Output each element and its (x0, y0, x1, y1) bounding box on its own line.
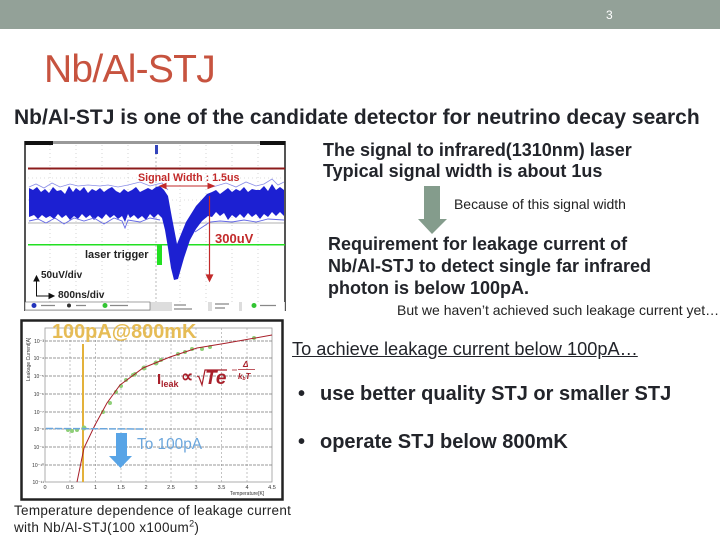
chart: leakage current vs temperature (20, 319, 284, 501)
arrow: to 100pA (109, 433, 132, 468)
x axis labels: 0 (43, 485, 47, 491)
fit curve (77, 335, 272, 482)
formula: Te (205, 368, 227, 389)
bullet: better quality: use better quality STJ or smaller STJ (320, 383, 671, 405)
label: 100pA at 800mK: 100pA@800mK (52, 321, 197, 343)
formula (157, 360, 255, 389)
subtitle: Nb/Al-STJ is one of the candidate detector for neutrino decay search (14, 106, 700, 129)
axis arrows (34, 276, 54, 298)
title: Nb/Al-STJ (44, 48, 215, 91)
header bar (0, 0, 720, 29)
red threshold line (28, 168, 285, 170)
text block: requirement: photon is below 100pA. (328, 278, 529, 298)
bullet: lower temperature: • (298, 431, 305, 453)
label: 300uV: 300uV (215, 231, 254, 246)
orange 800 mK line (82, 344, 84, 482)
y axis labels: 10⁻⁶ (34, 392, 44, 398)
x axis labels: 1 (94, 485, 97, 491)
x axis title: Temperature[K] (230, 491, 265, 497)
chart: oscilloscope signal (24, 141, 286, 311)
status strip (25, 302, 285, 311)
x axis labels: 4.5 (268, 485, 276, 491)
text block: signal description (323, 140, 632, 181)
y axis title: Leakage Current[A] (26, 337, 32, 381)
measured data points (66, 336, 256, 433)
formula: ∝ (181, 367, 193, 386)
y axis labels: 10⁻⁸ (34, 427, 44, 433)
text block: signal description: The signal to infrared(1310nm) laser (323, 140, 632, 160)
y axis labels: 10⁻⁷ (34, 410, 44, 416)
text block: requirement (328, 234, 651, 298)
caption: Temperature dependence of leakage current (14, 503, 291, 518)
formula: T (246, 372, 252, 381)
noise band and pulse (29, 179, 284, 280)
x axis labels: 2 (144, 485, 148, 491)
x axis labels (43, 485, 276, 491)
y axis labels (32, 339, 44, 486)
x axis labels: 2.5 (167, 485, 175, 491)
heading: how to achieve: To achieve leakage current below 100pA… (292, 339, 638, 359)
y axis labels: 10⁻⁴ (34, 356, 44, 362)
y axis labels: 10⁻⁹ (34, 445, 44, 451)
text block: requirement: Requirement for leakage current of (328, 234, 627, 254)
arrow: 300uV (206, 196, 212, 281)
text block: signal description: Typical signal width is about 1us (323, 161, 602, 181)
blue dashed level (46, 428, 146, 430)
formula: leak (161, 379, 180, 389)
x axis labels: 3 (194, 485, 198, 491)
y axis labels: 10⁻¹⁰ (32, 463, 44, 469)
x axis labels: 1.5 (117, 485, 125, 491)
y axis labels: 10⁻³ (34, 339, 44, 345)
bullet: better quality: • (298, 383, 305, 405)
formula: Δ (242, 360, 249, 369)
bullet: lower temperature: operate STJ below 800mK (320, 431, 568, 453)
y axis labels: 10⁻⁵ (34, 374, 44, 380)
formula: I (157, 371, 161, 388)
label: horizontal scale: 800ns/div (58, 290, 105, 301)
caption: with Nb/Al-STJ(100 x100um2) (14, 518, 199, 535)
label: laser trigger: laser trigger (85, 249, 149, 261)
page number: 3 (606, 8, 613, 22)
label: vertical scale: 50uV/div (41, 270, 83, 281)
note: not yet achieved: But we haven’t achieved such leakage current yet… (397, 302, 719, 318)
label: to 100pA: To 100pA (137, 436, 203, 453)
green trigger (28, 244, 285, 265)
label: signal width: Signal Width : 1.5us (138, 172, 239, 184)
text block: requirement: Nb/Al-STJ to detect single far infrared (328, 256, 651, 276)
formula: k (238, 372, 242, 381)
x axis labels: 3.5 (218, 485, 225, 491)
icon: down arrow (418, 186, 447, 234)
formula: b (242, 376, 246, 382)
arrow: signal width (160, 184, 214, 188)
y axis labels: 10⁻¹¹ (32, 480, 44, 486)
x axis labels: 4 (245, 485, 249, 491)
note: because of signal width: Because of this signal width (454, 196, 626, 212)
x axis labels: 0.5 (66, 485, 74, 491)
caption (14, 503, 291, 535)
